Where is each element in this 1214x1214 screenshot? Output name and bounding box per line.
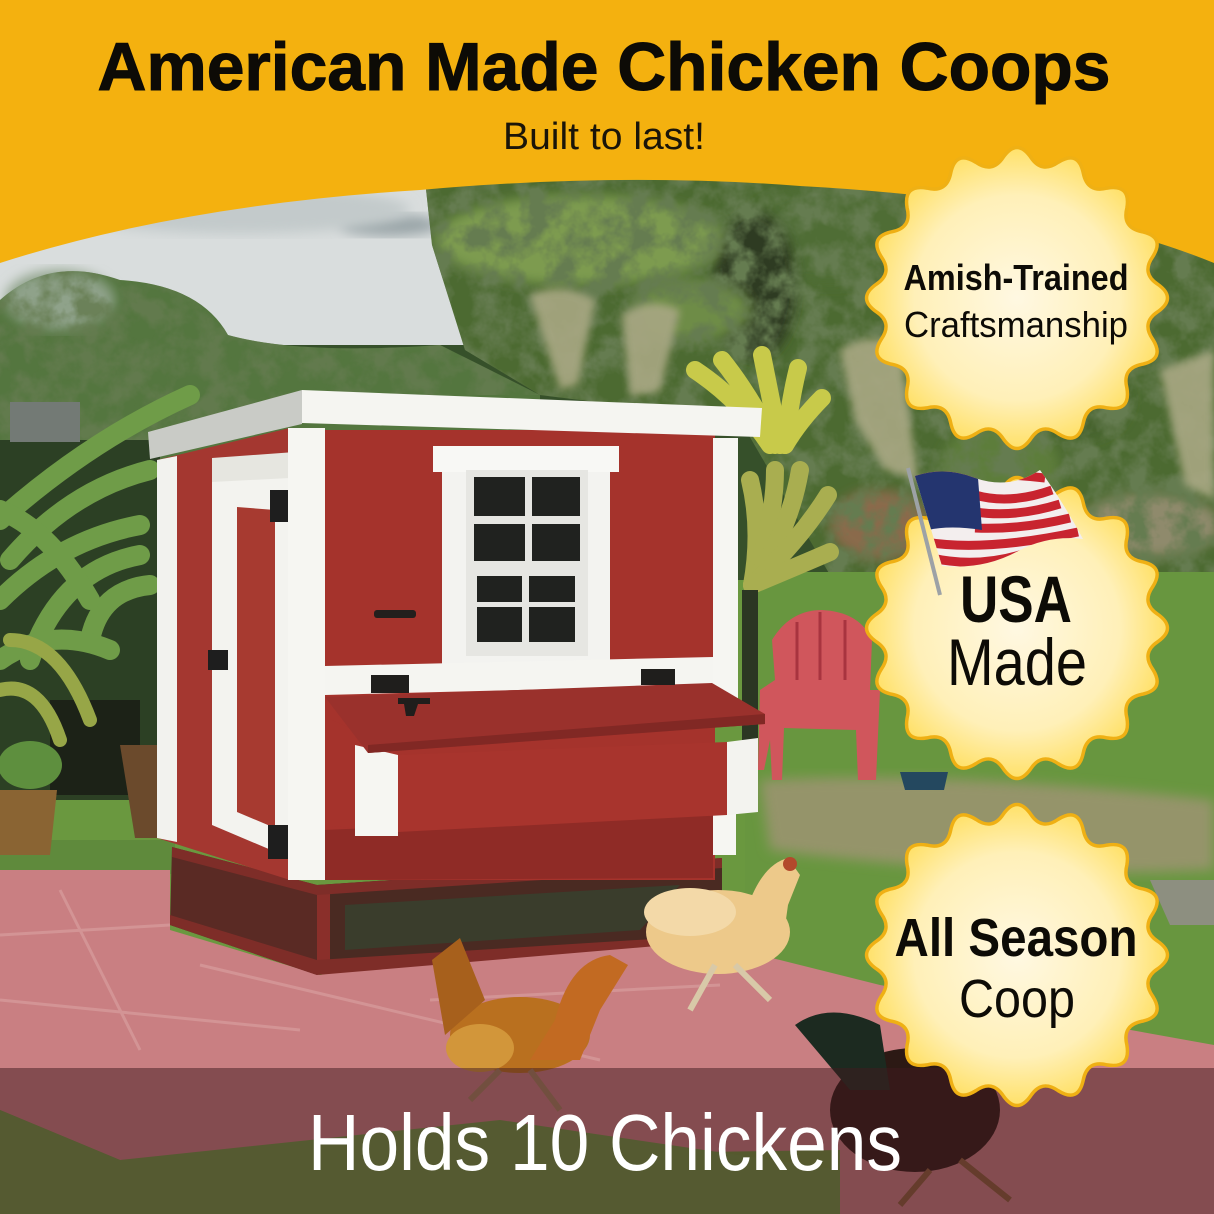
orange hen: [432, 938, 628, 1110]
foreground grass: [0, 1110, 840, 1214]
coop window: [433, 446, 619, 665]
left plants: [0, 395, 190, 855]
grass and dirt: [745, 572, 1214, 1052]
dark rooster: [795, 1012, 1010, 1205]
coop left side wall: [157, 428, 295, 880]
badge: USA Made: USA: [960, 562, 1072, 636]
red adirondack chair: [758, 610, 880, 780]
icon: American flag: [906, 468, 1083, 596]
badge: All Season Coop: Coop: [959, 969, 1075, 1029]
coop front wall: [325, 430, 715, 880]
nesting box: [325, 669, 765, 836]
pavers: [0, 870, 1214, 1214]
badge: USA Made: Made: [947, 625, 1087, 699]
blue water bowl: [900, 772, 948, 790]
coop white corner posts: [288, 428, 738, 880]
coop roof: [148, 390, 762, 459]
distant trees on the left: [0, 264, 540, 460]
nesting box latches: [371, 669, 675, 716]
badge: Amish-Trained Craftsmanship: Amish-Trained: [904, 257, 1128, 298]
capacity caption: Holds 10 Chickens: [308, 1098, 902, 1187]
hanging moss: [530, 289, 1214, 500]
top gold banner: [0, 0, 1214, 263]
yellow palm fronds: [695, 355, 830, 585]
title: American Made Chicken Coops: [98, 29, 1110, 105]
badge: Amish-Trained Craftsmanship: Craftsmanship: [904, 304, 1128, 345]
large mossy tree: [420, 180, 1214, 580]
chicken coop: [148, 390, 765, 975]
badge: Amish-Trained Craftsmanship: [867, 148, 1167, 448]
horizontal white trim: [325, 657, 713, 695]
bottom translucent banner: [0, 1068, 1214, 1214]
badge: All Season Coop: [867, 805, 1167, 1105]
coop handle: [374, 610, 416, 618]
badge: USA Made: [867, 478, 1167, 778]
badge: All Season Coop: All Season: [894, 908, 1138, 968]
coop wire run base: [170, 847, 722, 975]
background foliage band: [0, 345, 1214, 580]
golden hen: [644, 857, 800, 1010]
coop lower shaded wall: [325, 812, 713, 880]
subtitle: Built to last!: [503, 116, 705, 158]
sky: [0, 0, 560, 400]
